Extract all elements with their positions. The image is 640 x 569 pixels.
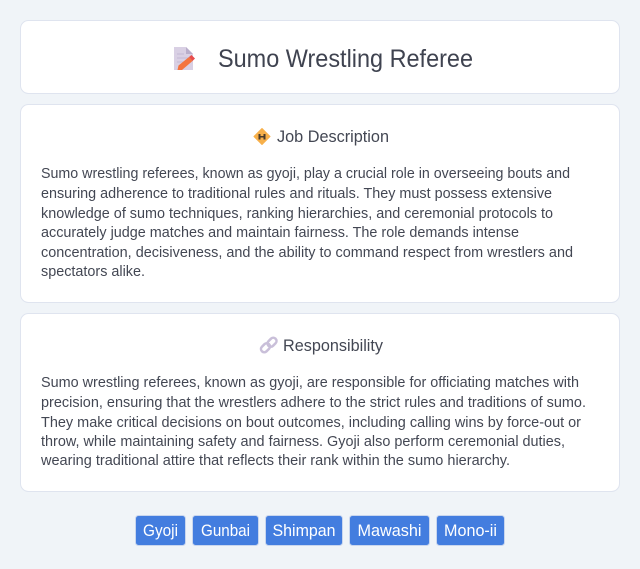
tags [136,516,504,546]
heading: page title: Sumo Wrestling Referee [218,45,473,73]
tag: Gunbai [192,516,258,546]
text block: job description body: accurately judge matches and maintain fairness. The role demands intense [41,225,519,241]
icon: orange diamond [254,128,270,144]
tag: Mawashi: Mawashi [358,522,422,540]
text block: job description body: concentration, decisiveness, and the ability to command respect from wrestlers and [41,245,573,261]
tag: Mono-ii [436,516,504,546]
text block: responsibility body: They make critical decisions on bout outcomes, including calling wins by force-out or [41,415,581,431]
tag: Shimpan: Shimpan [272,522,336,540]
tag: Gyoji [136,516,186,546]
text block: responsibility body: Sumo wrestling referees, known as gyoji, are responsible for officiating matches with [41,375,579,391]
tag: Mono-ii: Mono-ii [444,522,497,540]
text block: job description body: Sumo wrestling referees, known as gyoji, play a crucial role in overseeing bouts and [41,166,570,182]
panel: responsibility [20,314,620,492]
text block: responsibility body: throw, while maintaining safety and fairness. Gyoji also perform ceremonial duties, [41,434,565,450]
tag: Gunbai: Gunbai [201,522,250,540]
text block: job description body [41,166,573,280]
heading: job description: Job Description [277,128,389,146]
text block: responsibility body [40,375,586,469]
text block: responsibility body: precision, ensuring that the wrestlers adhere to the strict rules and traditions of sumo. [41,395,586,411]
text block: job description body: knowledge of sumo techniques, ranking hierarchies, and ceremonial protocols to [41,206,553,222]
panel: job description [20,104,620,302]
panel: title [20,20,620,94]
text block: responsibility body: wearing traditional attire that reflects their rank within the sumo hierarchy. [40,453,510,469]
icon: document with pencil [174,47,195,70]
tag: Gyoji: Gyoji [143,522,178,540]
heading: responsibility: Responsibility [283,337,384,355]
text block: job description body: spectators alike. [41,264,145,280]
icon: chain link [260,336,278,354]
tag: Shimpan [266,516,342,546]
tag: Mawashi [350,516,430,546]
text block: job description body: ensuring adherence to traditional rules and rituals. They must possess extensive [41,186,552,202]
